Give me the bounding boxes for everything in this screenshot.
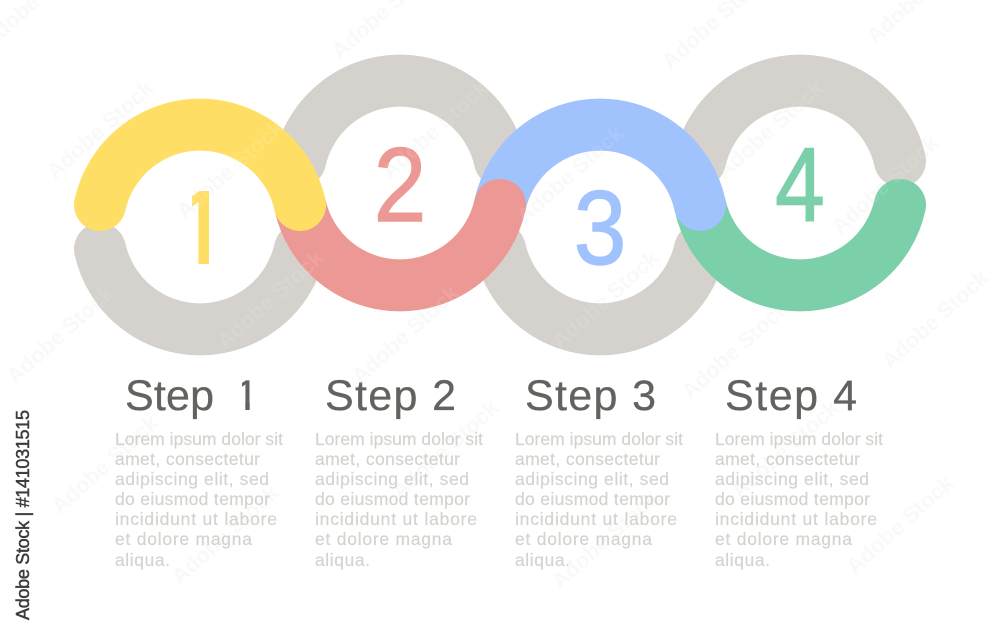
step 1 column	[115, 372, 283, 570]
step 4 column	[715, 372, 883, 570]
watermark pattern on background: Adobe Stock	[512, 120, 629, 229]
watermark pattern on background: Adobe Stock	[677, 295, 794, 404]
step 1 body text: adipiscing elit, sed	[115, 469, 269, 489]
green lower arc of ring 4	[700, 205, 900, 285]
step 2 heading: Step 2	[325, 372, 456, 420]
watermark pattern on background: Adobe Stock	[547, 245, 664, 354]
grey upper arc of ring 2	[300, 81, 500, 161]
number 4: 4	[775, 126, 825, 244]
step 4 body text: Lorem ipsum dolor sit	[715, 429, 883, 449]
step 3 heading: Step 3	[525, 372, 656, 420]
step 2 column	[315, 372, 483, 570]
step 2 body text	[315, 429, 483, 570]
watermark pattern on background: Adobe Stock	[347, 280, 464, 389]
number 1: 1	[173, 170, 231, 287]
watermark pattern on background: Adobe Stock	[2, 280, 119, 389]
red lower arc of ring 2	[300, 205, 500, 285]
watermark highlights over artwork: Adobe Stock	[512, 120, 629, 229]
step 3 body text: et dolore magna	[515, 529, 652, 549]
watermark highlights over artwork: Adobe Stock	[2, 280, 119, 389]
watermark highlights over artwork: Adobe Stock	[547, 245, 664, 354]
step 2 body text: incididunt ut labore	[315, 509, 477, 529]
watermark pattern on background: Adobe Stock	[377, 75, 494, 184]
grey lower arc of ring 3	[500, 249, 700, 329]
step 1 body text: incididunt ut labore	[115, 509, 277, 529]
watermark highlights over artwork: Adobe Stock	[42, 75, 159, 184]
step 2 body text: et dolore magna	[315, 529, 452, 549]
step 2 body text: Lorem ipsum dolor sit	[315, 429, 483, 449]
step 1 body text: et dolore magna	[115, 529, 252, 549]
step 2 body text: adipiscing elit, sed	[315, 469, 469, 489]
watermark pattern on background: Adobe Stock	[727, 395, 844, 504]
step 3 body text	[515, 429, 683, 570]
number 3: 3	[574, 170, 626, 287]
chain of four ring segments	[100, 81, 900, 329]
step 3 body text: adipiscing elit, sed	[515, 469, 669, 489]
step 4 body text: amet, consectetur	[715, 449, 860, 469]
watermark highlights over artwork: Adobe Stock	[172, 115, 289, 224]
step 1 body text: aliqua.	[115, 550, 170, 570]
step 2 body text: do eiusmod tempor	[315, 489, 470, 509]
step 3 column	[515, 372, 683, 570]
step 2 body text: aliqua.	[315, 550, 370, 570]
step 1 body text: Lorem ipsum dolor sit	[115, 429, 283, 449]
yellow upper arc of ring 1	[100, 125, 300, 205]
step 3 body text: amet, consectetur	[515, 449, 660, 469]
step 4 body text: aliqua.	[715, 550, 770, 570]
step 1 body text: amet, consectetur	[115, 449, 260, 469]
watermark pattern on background: Adobe Stock	[172, 115, 289, 224]
step 4 body text	[715, 429, 883, 570]
number 2: 2	[374, 127, 426, 244]
watermark pattern on background: Adobe Stock	[387, 395, 504, 504]
step 4 heading: Step 4	[725, 372, 857, 420]
watermark pattern on background: Adobe Stock	[167, 480, 284, 589]
watermark pattern on background: Adobe Stock	[547, 485, 664, 594]
number 1	[192, 191, 209, 264]
step 4 body text: do eiusmod tempor	[715, 489, 870, 509]
stock image id, vertical: Adobe Stock | #141031515	[13, 410, 33, 620]
step 3 body text: do eiusmod tempor	[515, 489, 670, 509]
watermark highlights over artwork: Adobe Stock	[827, 130, 944, 239]
grey lower arc of ring 1	[100, 249, 300, 329]
blue upper arc of ring 3	[500, 125, 700, 205]
watermark pattern on background: Adobe Stock	[877, 265, 994, 374]
step 3 body text: aliqua.	[515, 550, 570, 570]
step 1 body text: do eiusmod tempor	[115, 489, 270, 509]
watermark highlights over artwork	[2, 75, 944, 389]
watermark pattern on background: Adobe Stock	[827, 130, 944, 239]
watermark highlights over artwork: Adobe Stock	[712, 75, 829, 184]
watermark pattern on background: Adobe Stock	[712, 75, 829, 184]
grey upper arc of ring 4	[700, 81, 900, 161]
watermark highlights over artwork: Adobe Stock	[347, 280, 464, 389]
step 3 body text: Lorem ipsum dolor sit	[515, 429, 683, 449]
step 1 body text	[115, 429, 283, 570]
step 4 body text: adipiscing elit, sed	[715, 469, 869, 489]
watermark highlights over artwork: Adobe Stock	[377, 75, 494, 184]
watermark pattern on background: Adobe Stock	[47, 410, 164, 519]
step 2 body text: amet, consectetur	[315, 449, 460, 469]
step 4 body text: incididunt ut labore	[715, 509, 877, 529]
watermark pattern on background: Adobe Stock	[842, 470, 959, 579]
watermark highlights over artwork: Adobe Stock	[212, 245, 329, 354]
watermark pattern on background: Adobe Stock	[212, 245, 329, 354]
step 1 heading	[126, 380, 250, 420]
step 1 heading: Step	[125, 372, 214, 420]
step 4 body text: et dolore magna	[715, 529, 852, 549]
step 3 body text: incididunt ut labore	[515, 509, 677, 529]
watermark pattern on background: Adobe Stock	[42, 75, 159, 184]
step 1 heading: 1	[235, 372, 259, 420]
